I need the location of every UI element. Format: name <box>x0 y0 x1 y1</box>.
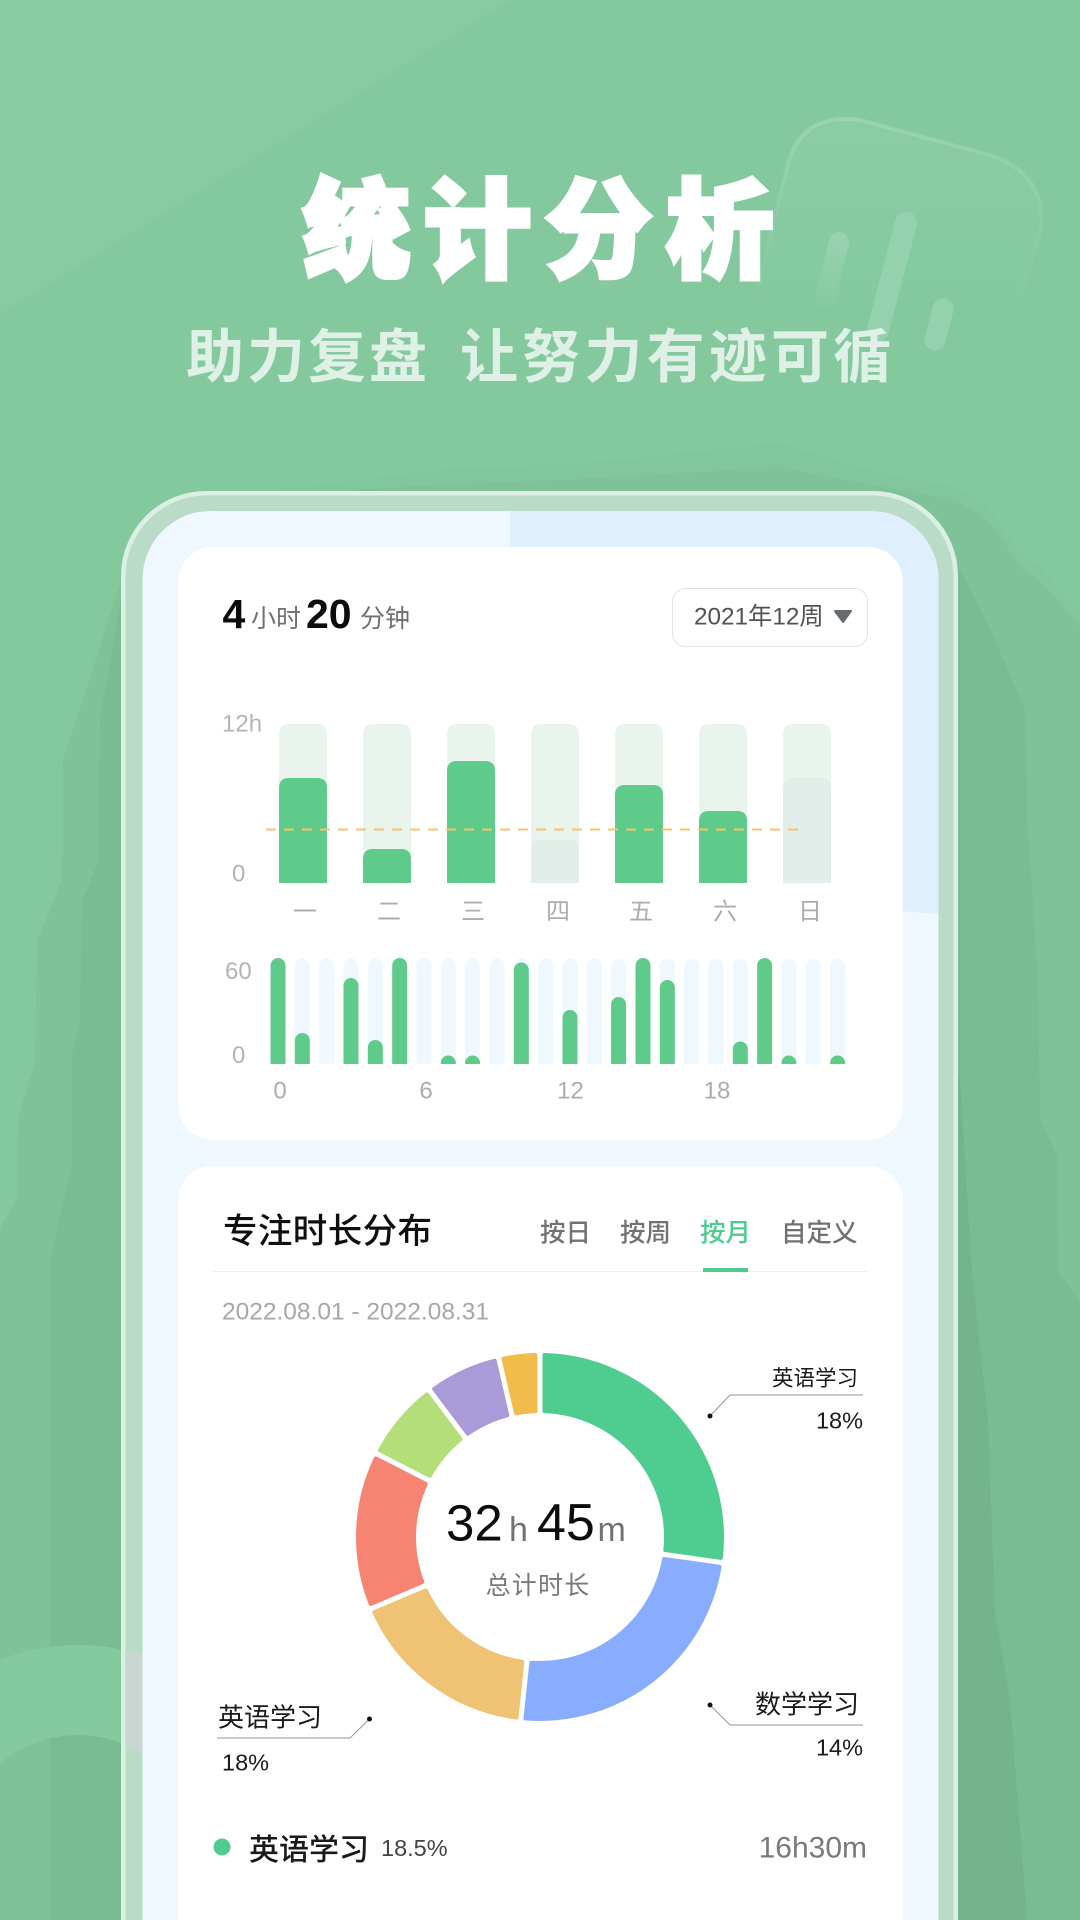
range tabs: 按周 <box>620 1212 671 1250</box>
donut centre total <box>446 1494 626 1602</box>
donut chart <box>358 1355 722 1719</box>
subtitle: 助力复盘 <box>186 310 430 394</box>
bar chart: minutes per hour: 60 <box>225 958 252 985</box>
bar chart: hours per weekday <box>222 710 831 926</box>
callout: bottom left: 英语学习 <box>218 1698 322 1734</box>
total duration: 4 <box>222 591 246 637</box>
range tabs: 按月 <box>700 1212 751 1250</box>
range tabs: 自定义 <box>781 1212 858 1250</box>
legend row: 英语学习 <box>249 1825 369 1869</box>
panel: weekly focus summary <box>178 547 903 1140</box>
bar chart: hours per weekday: 0 <box>232 860 245 888</box>
date range: 2022.08.01 - 2022.08.31 <box>222 1298 489 1326</box>
decoration: tilted phone outline with bars <box>753 119 1041 340</box>
callout: bottom right: 14% <box>816 1734 863 1760</box>
subtitle: 让努力有迹可循 <box>460 310 895 394</box>
callout: top right: 18% <box>816 1408 863 1434</box>
bar chart: hours per weekday: 12h <box>222 710 262 738</box>
bar chart: minutes per hour <box>225 958 845 1104</box>
decoration: bottom-left ring <box>0 1645 130 1763</box>
callout: top right <box>708 1362 863 1434</box>
callout: bottom left: 18% <box>222 1750 269 1776</box>
bar chart: hours per weekday: 四 <box>546 892 570 926</box>
legend row <box>214 1825 867 1869</box>
donut centre total: 总计时长 <box>486 1566 590 1602</box>
bar chart: hours per weekday: 日 <box>798 892 822 926</box>
panel heading: 专注时长分布 <box>223 1203 432 1253</box>
donut centre total: 32 <box>446 1494 503 1552</box>
bar chart: minutes per hour: 0 <box>273 1078 287 1104</box>
bar chart: hours per weekday: 五 <box>629 892 653 926</box>
phone frame <box>121 491 958 1920</box>
bar chart: hours per weekday: 三 <box>461 892 485 926</box>
donut centre total: h <box>509 1511 528 1549</box>
total duration: 分钟 <box>360 599 410 635</box>
subtitle <box>186 310 895 394</box>
bar chart: minutes per hour: 18 <box>704 1078 730 1104</box>
total duration <box>222 591 410 637</box>
range tabs <box>213 1212 867 1272</box>
callout: bottom left <box>217 1698 372 1776</box>
week selector dropdown: 2021年12周 <box>694 604 824 630</box>
bar chart: minutes per hour: 12 <box>557 1078 584 1104</box>
week selector dropdown <box>672 588 868 646</box>
legend row: 16h30m <box>759 1832 867 1864</box>
donut centre total: m <box>598 1511 626 1549</box>
callout: bottom right <box>708 1684 863 1760</box>
range tabs: 按日 <box>540 1212 591 1250</box>
callout: top right: 英语学习 <box>772 1362 858 1392</box>
bar chart: minutes per hour: 6 <box>419 1078 433 1104</box>
bar chart: hours per weekday: 一 <box>293 892 317 926</box>
title: 统计分析 <box>303 144 787 300</box>
bar chart: hours per weekday: 六 <box>713 892 737 926</box>
donut centre total: 45 <box>537 1494 595 1552</box>
total duration: 20 <box>306 591 352 637</box>
callout: bottom right: 数学学习 <box>755 1684 859 1722</box>
bar chart: minutes per hour: 0 <box>232 1042 245 1069</box>
total duration: 小时 <box>251 599 301 635</box>
panel: focus duration distribution <box>178 1166 903 1920</box>
bar chart: hours per weekday: 二 <box>377 892 401 926</box>
legend row: 18.5% <box>381 1835 448 1861</box>
